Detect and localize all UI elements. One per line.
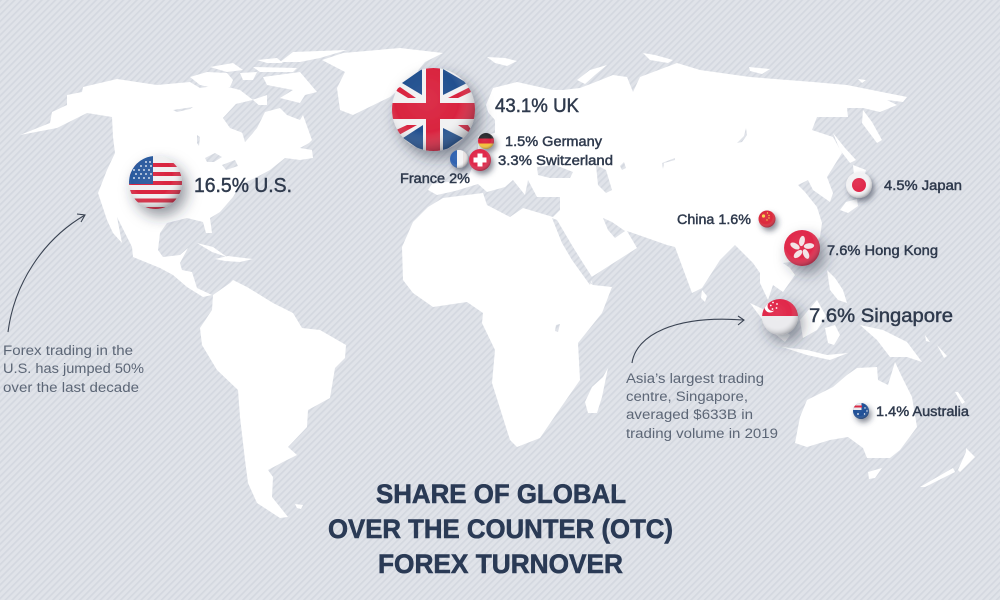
marker: United States — [129, 156, 183, 210]
North America — [20, 79, 313, 297]
note: U.S. forex growth: U.S. has jumped 50% — [3, 361, 144, 376]
marker: Germany — [478, 133, 494, 150]
label: Japan: 4.5% Japan — [884, 178, 962, 193]
label: Singapore: 7.6% Singapore — [809, 306, 953, 327]
note: U.S. forex growth: Forex trading in the — [3, 343, 133, 358]
note: Singapore trading volume: centre, Singapore, — [626, 389, 748, 404]
label: Switzerland: 3.3% Switzerland — [498, 153, 613, 168]
Kamchatka — [862, 110, 882, 143]
world map — [20, 48, 975, 518]
inland seas and lakes — [173, 100, 747, 238]
Africa — [402, 193, 612, 447]
marker: Switzerland — [469, 149, 491, 171]
marker: Japan — [846, 172, 872, 198]
Japan and Sakhalin — [833, 133, 866, 213]
northern Russian islands — [487, 53, 866, 84]
Greenland — [322, 48, 443, 115]
Madagascar — [585, 368, 608, 413]
label: Hong Kong: 7.6% Hong Kong — [827, 243, 938, 258]
label: UK: 43.1% UK — [495, 96, 579, 117]
title: SHARE OF GLOBAL — [376, 479, 626, 509]
marker: United Kingdom — [390, 66, 478, 154]
label: France: France 2% — [400, 171, 470, 186]
note: U.S. forex growth: over the last decade — [3, 380, 139, 395]
Falklands — [295, 504, 303, 509]
marker: Australia — [853, 403, 869, 419]
note: Singapore trading volume — [626, 371, 778, 441]
Australia — [795, 362, 917, 458]
note: Singapore trading volume: Asia’s largest trading — [626, 371, 764, 386]
note: Singapore trading volume: trading volume in 2019 — [626, 426, 778, 441]
title: FOREX TURNOVER — [378, 549, 623, 579]
Arctic islands — [190, 50, 347, 105]
note: Singapore trading volume: averaged $633B in — [626, 407, 753, 422]
marker: Singapore — [761, 298, 799, 336]
label: Germany: 1.5% Germany — [505, 134, 602, 149]
title — [328, 479, 673, 579]
title: OVER THE COUNTER (OTC) — [328, 514, 673, 544]
Sri Lanka — [701, 290, 707, 302]
note: U.S. forex growth — [3, 343, 144, 395]
marker: Hong Kong — [784, 230, 820, 266]
arrow: Singapore note — [632, 316, 744, 363]
Red Sea and Lake Victoria — [552, 218, 592, 332]
Southeast Asia islands — [750, 270, 947, 362]
label: U.S.: 16.5% U.S. — [194, 174, 292, 197]
Eurasia — [428, 63, 907, 300]
Tasmania and New Zealand — [868, 392, 975, 487]
South America — [200, 280, 346, 518]
label: Australia: 1.4% Australia — [876, 404, 970, 419]
arrow: U.S. note — [8, 214, 85, 332]
label: China: China 1.6% — [677, 212, 751, 227]
Caribbean islands — [197, 243, 253, 262]
marker: China — [758, 210, 776, 228]
marker: France — [450, 150, 469, 168]
